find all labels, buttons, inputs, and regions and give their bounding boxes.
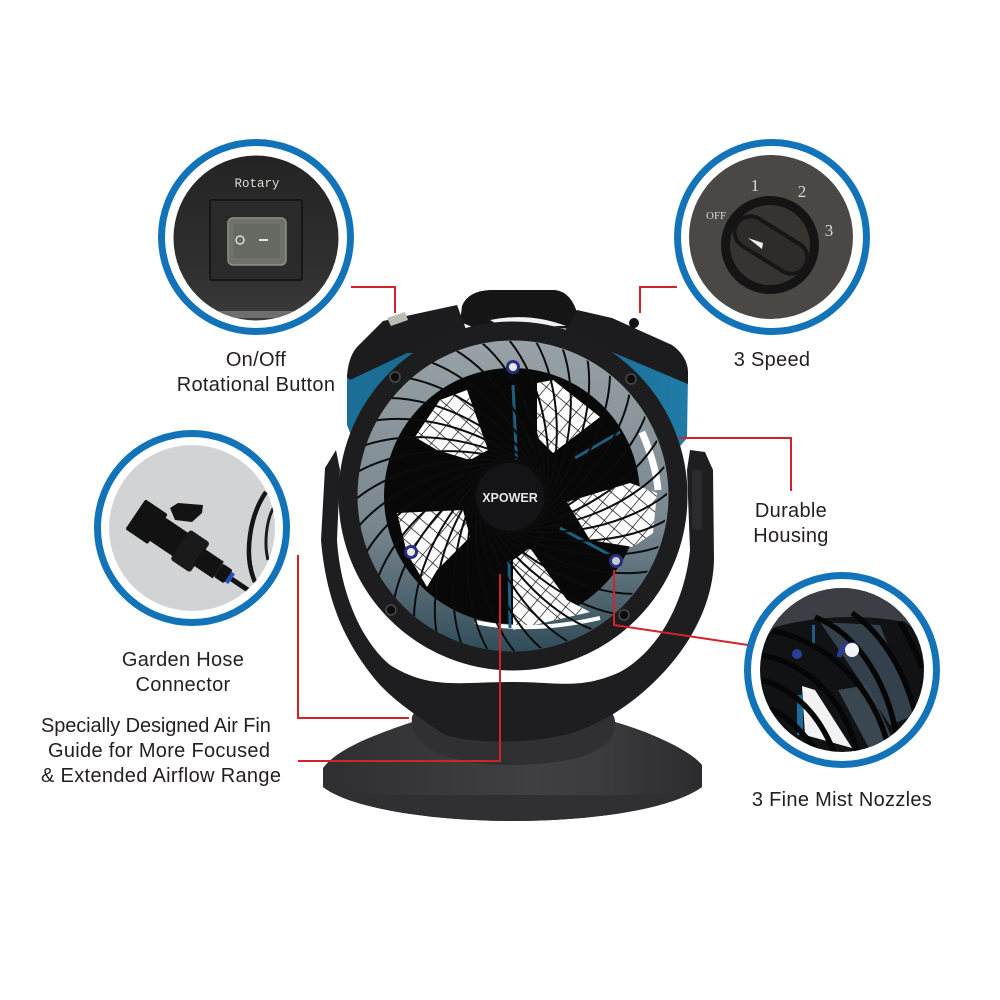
white background opening: [802, 686, 852, 748]
Rotary label: Rotary: [234, 177, 280, 191]
line to air fin guide: [298, 574, 500, 761]
ring screws: [386, 372, 636, 620]
blue struts: [797, 695, 803, 735]
label: on/off rotational button: [177, 349, 335, 396]
white openings between blades: [397, 380, 657, 630]
blue housing: [347, 345, 688, 470]
label: garden hose connector: Garden Hose: [122, 649, 244, 671]
circle detail: garden hose connector: [98, 434, 286, 622]
line to housing: [679, 438, 791, 491]
speed knob on top: [629, 318, 639, 328]
dial handle: [732, 214, 809, 276]
speed numbers: 3: [825, 221, 833, 240]
label: garden hose connector: Connector: [136, 674, 231, 696]
label: durable housing: Durable: [755, 500, 827, 522]
product: XPOWER misting fan: [321, 290, 714, 821]
rotation switch on top: [387, 312, 408, 326]
circle detail: mist nozzles: [748, 576, 936, 764]
black housing top: [347, 305, 688, 384]
label: durable housing: [753, 500, 829, 547]
circle detail: rotary switch: [162, 142, 350, 332]
white rim crescents: [475, 618, 600, 627]
white nozzle tip: [845, 643, 859, 657]
line to speed knob: [640, 287, 677, 313]
base neck: [412, 706, 615, 765]
hub with logo: XPOWER: [482, 491, 538, 505]
label: air fin guide: & Extended Airflow Range: [41, 765, 281, 787]
curved guard fins: [762, 613, 922, 755]
fan base: [323, 722, 702, 821]
speed numbers: [706, 180, 833, 236]
speed numbers: 1: [751, 176, 759, 195]
yoke stand: [321, 450, 714, 742]
switch recess: [210, 200, 302, 280]
blue nozzle rings: [839, 645, 856, 657]
lighter bottom strip: [218, 311, 294, 318]
fan blades: [355, 339, 669, 653]
label: air fin guide: Guide for More Focused: [48, 740, 270, 762]
coiled hose: [249, 492, 266, 582]
base lower rim: [323, 785, 702, 821]
handle: [460, 290, 580, 330]
valve lever: [170, 503, 203, 522]
label: air fin guide: [41, 715, 281, 787]
speed numbers: 2: [798, 182, 806, 201]
label: on/off rotational button: Rotational Button: [177, 374, 335, 396]
mist nozzles on fan: [404, 360, 623, 568]
hub with logo: [476, 463, 544, 531]
guard rear background: [355, 339, 669, 653]
top band: [768, 588, 912, 634]
circle detail: speed dial: [678, 142, 866, 332]
spiral guard wires: [355, 339, 669, 653]
line to hose connector: [298, 555, 409, 718]
line to rotation button: [351, 287, 395, 313]
label: air fin guide: Specially Designed Air Fin: [41, 715, 271, 737]
white gap under handle: [490, 317, 566, 326]
yoke side pivot right: [692, 470, 702, 530]
blue struts: [509, 385, 620, 628]
label: fine mist nozzles: 3 Fine Mist Nozzles: [752, 789, 932, 811]
callout lines: [298, 287, 791, 761]
dial ring: [721, 196, 819, 294]
label: durable housing: Housing: [753, 525, 829, 547]
speed numbers: OFF: [706, 210, 726, 222]
line to mist nozzle: [614, 570, 748, 645]
connector body: [126, 500, 250, 592]
label: garden hose connector: [122, 649, 244, 696]
front ring: [348, 331, 678, 661]
label: 3 speed: 3 Speed: [734, 349, 810, 371]
slate gaps between fins: [820, 622, 915, 725]
label: on/off rotational button: On/Off: [226, 349, 286, 371]
translucent rocker: [228, 218, 286, 265]
